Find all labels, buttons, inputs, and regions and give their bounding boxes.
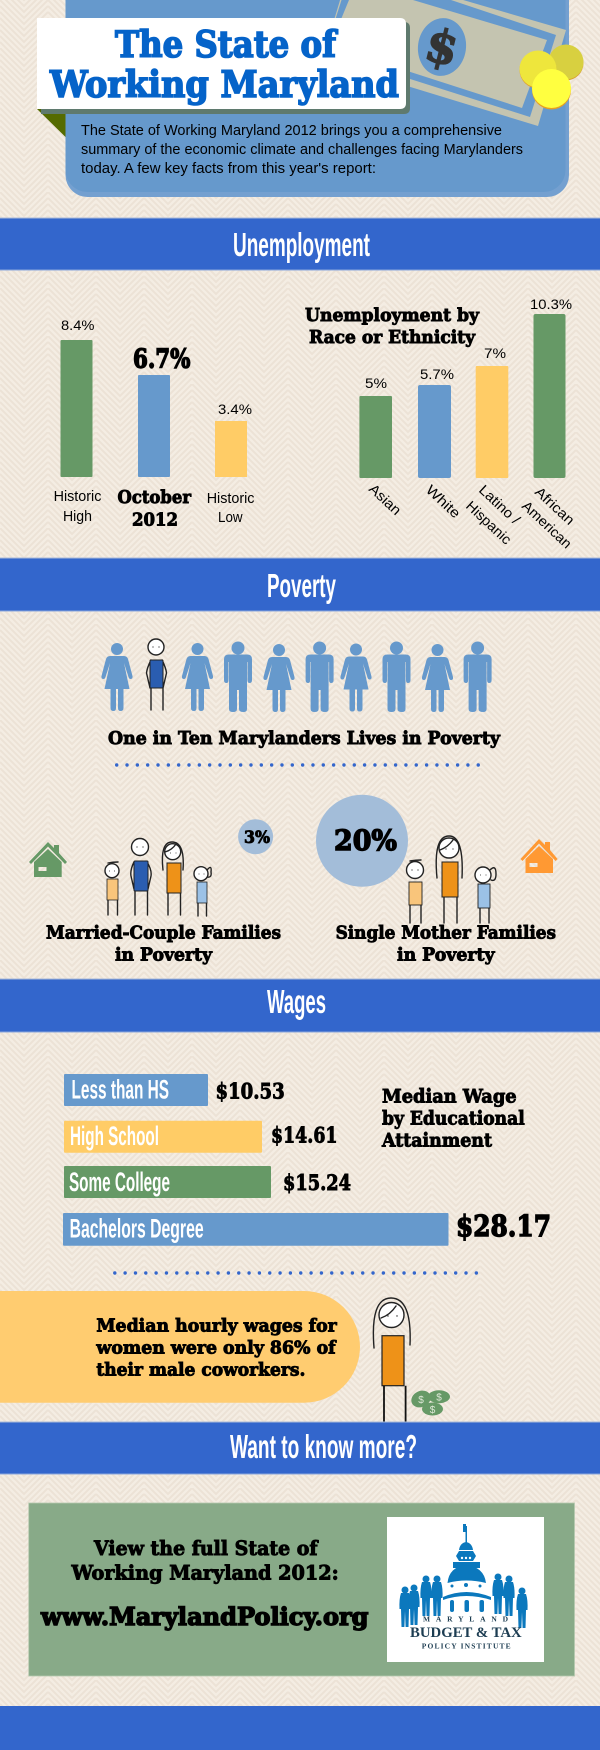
logo: capitol dome <box>443 1524 491 1612</box>
intro text: The State of Working Maryland 2012 brings you a comprehensive <box>81 122 502 139</box>
bar: some college <box>64 1166 351 1198</box>
bar: historic low: 3.4% <box>218 401 252 417</box>
bar: Asian: Asian <box>366 480 405 518</box>
bar: some college: Some College <box>69 1167 170 1197</box>
heading: unemployment by race: Race or Ethnicity <box>309 327 476 348</box>
heading: unemployment by race <box>305 305 480 348</box>
call to action text: Working Maryland 2012: <box>71 1562 339 1585</box>
label: single mother families <box>336 923 556 966</box>
girl <box>194 867 211 916</box>
label: single mother families: in Poverty <box>397 945 495 966</box>
logo text: BUDGET & TAX <box>410 1625 522 1641</box>
bar: historic high <box>54 317 102 525</box>
icon: money <box>409 1388 450 1416</box>
section band: Poverty: Poverty <box>267 567 336 604</box>
label: married-couple families: Married-Couple Families <box>46 923 281 944</box>
bar: Asian <box>359 375 405 518</box>
heading: median wage: Median Wage <box>382 1086 517 1108</box>
icon: orange house <box>520 839 558 873</box>
bar: African American: African <box>532 483 578 528</box>
bar: bachelors degree: Bachelors Degree <box>70 1214 204 1244</box>
heading: median wage: Attainment <box>381 1130 492 1152</box>
bar: historic low: Low <box>218 509 243 526</box>
logo: Maryland Budget and Tax Policy Institute <box>387 1517 544 1662</box>
bar: less than high school: Less than HS <box>72 1075 169 1105</box>
logo text: POLICY INSTITUTE <box>422 1642 511 1651</box>
section band: Want to know more <box>0 1422 600 1474</box>
stick figure: highlighted person <box>146 639 166 710</box>
bar: historic low: Historic <box>207 490 255 507</box>
section band: Unemployment: Unemployment <box>233 226 370 263</box>
callout: 3 percent: 3% <box>244 828 270 848</box>
bar: historic low <box>207 401 255 526</box>
callout: 20 percent <box>316 795 408 887</box>
illustration: single mother family <box>406 836 496 923</box>
footer band <box>0 1706 600 1750</box>
heading: median wage <box>381 1086 525 1152</box>
banner fold <box>37 109 66 137</box>
label: married-couple families: in Poverty <box>115 945 213 966</box>
label: single mother families: Single Mother Families <box>336 923 556 944</box>
section band: Unemployment <box>0 218 600 270</box>
bar: White: White <box>423 481 464 521</box>
panel background <box>66 0 569 197</box>
boy <box>105 862 119 915</box>
title: Working Maryland <box>49 64 399 106</box>
title: The State of <box>115 24 338 66</box>
bar: Latino / Hispanic: Hispanic <box>463 497 515 547</box>
call to action text: View the full State of <box>93 1537 319 1560</box>
bar: less than high school: $10.53 <box>216 1079 285 1104</box>
bar: some college: $15.24 <box>283 1170 351 1195</box>
callout: women's wages <box>0 1291 360 1403</box>
father <box>131 838 151 915</box>
bar: bachelors degree: $28.17 <box>456 1209 551 1243</box>
website url: www.MarylandPolicy.org <box>40 1602 369 1631</box>
bar: high school: High School <box>70 1121 159 1151</box>
mother <box>162 842 183 915</box>
callout: women's wages: their male coworkers. <box>96 1360 305 1381</box>
icon: green house <box>29 842 67 877</box>
heading: unemployment by race: Unemployment by <box>305 305 480 326</box>
bar: White <box>418 366 464 521</box>
section band: Wages <box>0 978 600 1032</box>
boy <box>406 860 424 923</box>
callout: 3 percent <box>238 819 273 854</box>
callout: women's wages: women were only 86% of <box>95 1338 337 1359</box>
bar: African American: American <box>519 497 575 551</box>
heading: one in ten: One in Ten Marylanders Lives in Poverty <box>108 728 501 749</box>
title <box>49 24 399 106</box>
callout: women's wages: Median hourly wages for <box>96 1316 337 1337</box>
bar: historic high: 8.4% <box>61 317 94 333</box>
bar: African American: 10.3% <box>530 296 572 312</box>
bar: October 2012: 2012 <box>132 510 178 530</box>
icon: money: $ <box>418 1395 424 1406</box>
heading: median wage: by Educational <box>382 1108 525 1130</box>
bar: bachelors degree <box>63 1209 551 1246</box>
icon: coins <box>520 44 584 110</box>
icon: dollar bill <box>322 0 566 126</box>
panel: header introduction <box>37 0 584 197</box>
mother <box>436 836 462 923</box>
bar: October 2012: October <box>118 487 191 508</box>
bar: high school <box>64 1121 338 1153</box>
logo: silhouettes of people <box>399 1574 528 1628</box>
label: married-couple families <box>46 923 281 966</box>
bar: African American <box>519 296 578 551</box>
bar: Latino / Hispanic: Latino / <box>476 481 524 527</box>
callout: 20 percent: 20% <box>334 824 397 857</box>
section band: Wages: Wages <box>267 983 326 1020</box>
bar: Asian: 5% <box>365 375 387 391</box>
title banner <box>37 18 410 114</box>
intro text: today. A few key facts from this year's report: <box>81 160 376 177</box>
bar: October 2012: 6.7% <box>133 344 191 374</box>
icon: money: $ <box>430 1405 436 1416</box>
bar: Latino / Hispanic: 7% <box>484 345 506 361</box>
girl <box>475 867 496 923</box>
icon: dollar bill: $ <box>420 17 464 77</box>
illustration: married-couple family <box>105 838 211 916</box>
bar: high school: $14.61 <box>271 1123 338 1148</box>
illustration: woman with money <box>373 1298 450 1422</box>
bar chart: wages by education <box>63 1074 551 1246</box>
panel: call to action <box>29 1503 574 1676</box>
intro text <box>81 122 523 177</box>
bar: Latino / Hispanic <box>463 345 524 547</box>
call to action text <box>71 1537 339 1585</box>
bar: historic high: High <box>63 508 92 525</box>
pictogram: one in ten people <box>101 639 492 712</box>
bar chart: overall unemployment <box>54 317 255 530</box>
bar: White: 5.7% <box>420 366 454 382</box>
intro text: summary of the economic climate and challenges facing Marylanders <box>81 141 523 158</box>
icon: money: $ <box>436 1392 442 1404</box>
section band: Poverty <box>0 558 600 612</box>
bar: historic high: Historic <box>54 488 102 505</box>
bar chart: unemployment by race <box>359 296 578 551</box>
section band: Want to know more: Want to know more? <box>230 1428 417 1465</box>
logo text <box>410 1615 522 1651</box>
bar: October 2012 <box>118 344 191 530</box>
logo text: MARYLAND <box>423 1615 509 1624</box>
